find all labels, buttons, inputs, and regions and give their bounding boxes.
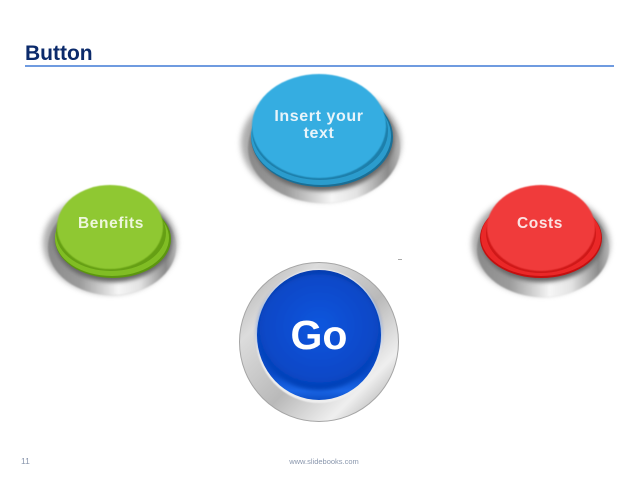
rim shadow: [481, 198, 603, 282]
button rim: [251, 87, 393, 187]
button face: [252, 74, 386, 178]
button shadow: [472, 193, 610, 295]
inner dark-to-light edge: [256, 269, 382, 403]
page number: 11: [21, 456, 30, 466]
small mark: [398, 259, 402, 260]
title: Button: [25, 42, 93, 65]
button label: Costs: [517, 215, 563, 232]
button: Benefits: [43, 185, 177, 295]
button label: Go: [291, 312, 347, 358]
outer silver ring: [240, 262, 398, 422]
button label: Insert your: [274, 108, 364, 125]
button rim: [55, 200, 171, 278]
silver base: [48, 199, 176, 295]
button face: [487, 185, 595, 271]
button: Costs: [472, 185, 610, 297]
button face: [57, 185, 163, 269]
rim shadow: [54, 198, 172, 282]
button: Insert your text: [241, 74, 401, 203]
button shadow: [43, 192, 177, 294]
button face: [258, 274, 380, 390]
title underline: [25, 65, 614, 67]
rim shadow: [252, 87, 394, 191]
silver base: [477, 201, 609, 297]
button rim: [480, 198, 602, 278]
button: Insert your text: text: [304, 125, 334, 142]
button shadow: [241, 85, 401, 201]
footer url: www.slidebooks.com: [288, 457, 359, 466]
silver base: [248, 93, 400, 203]
button lower band: [257, 270, 381, 400]
button: Go: [240, 262, 398, 422]
button label: Benefits: [78, 215, 144, 232]
